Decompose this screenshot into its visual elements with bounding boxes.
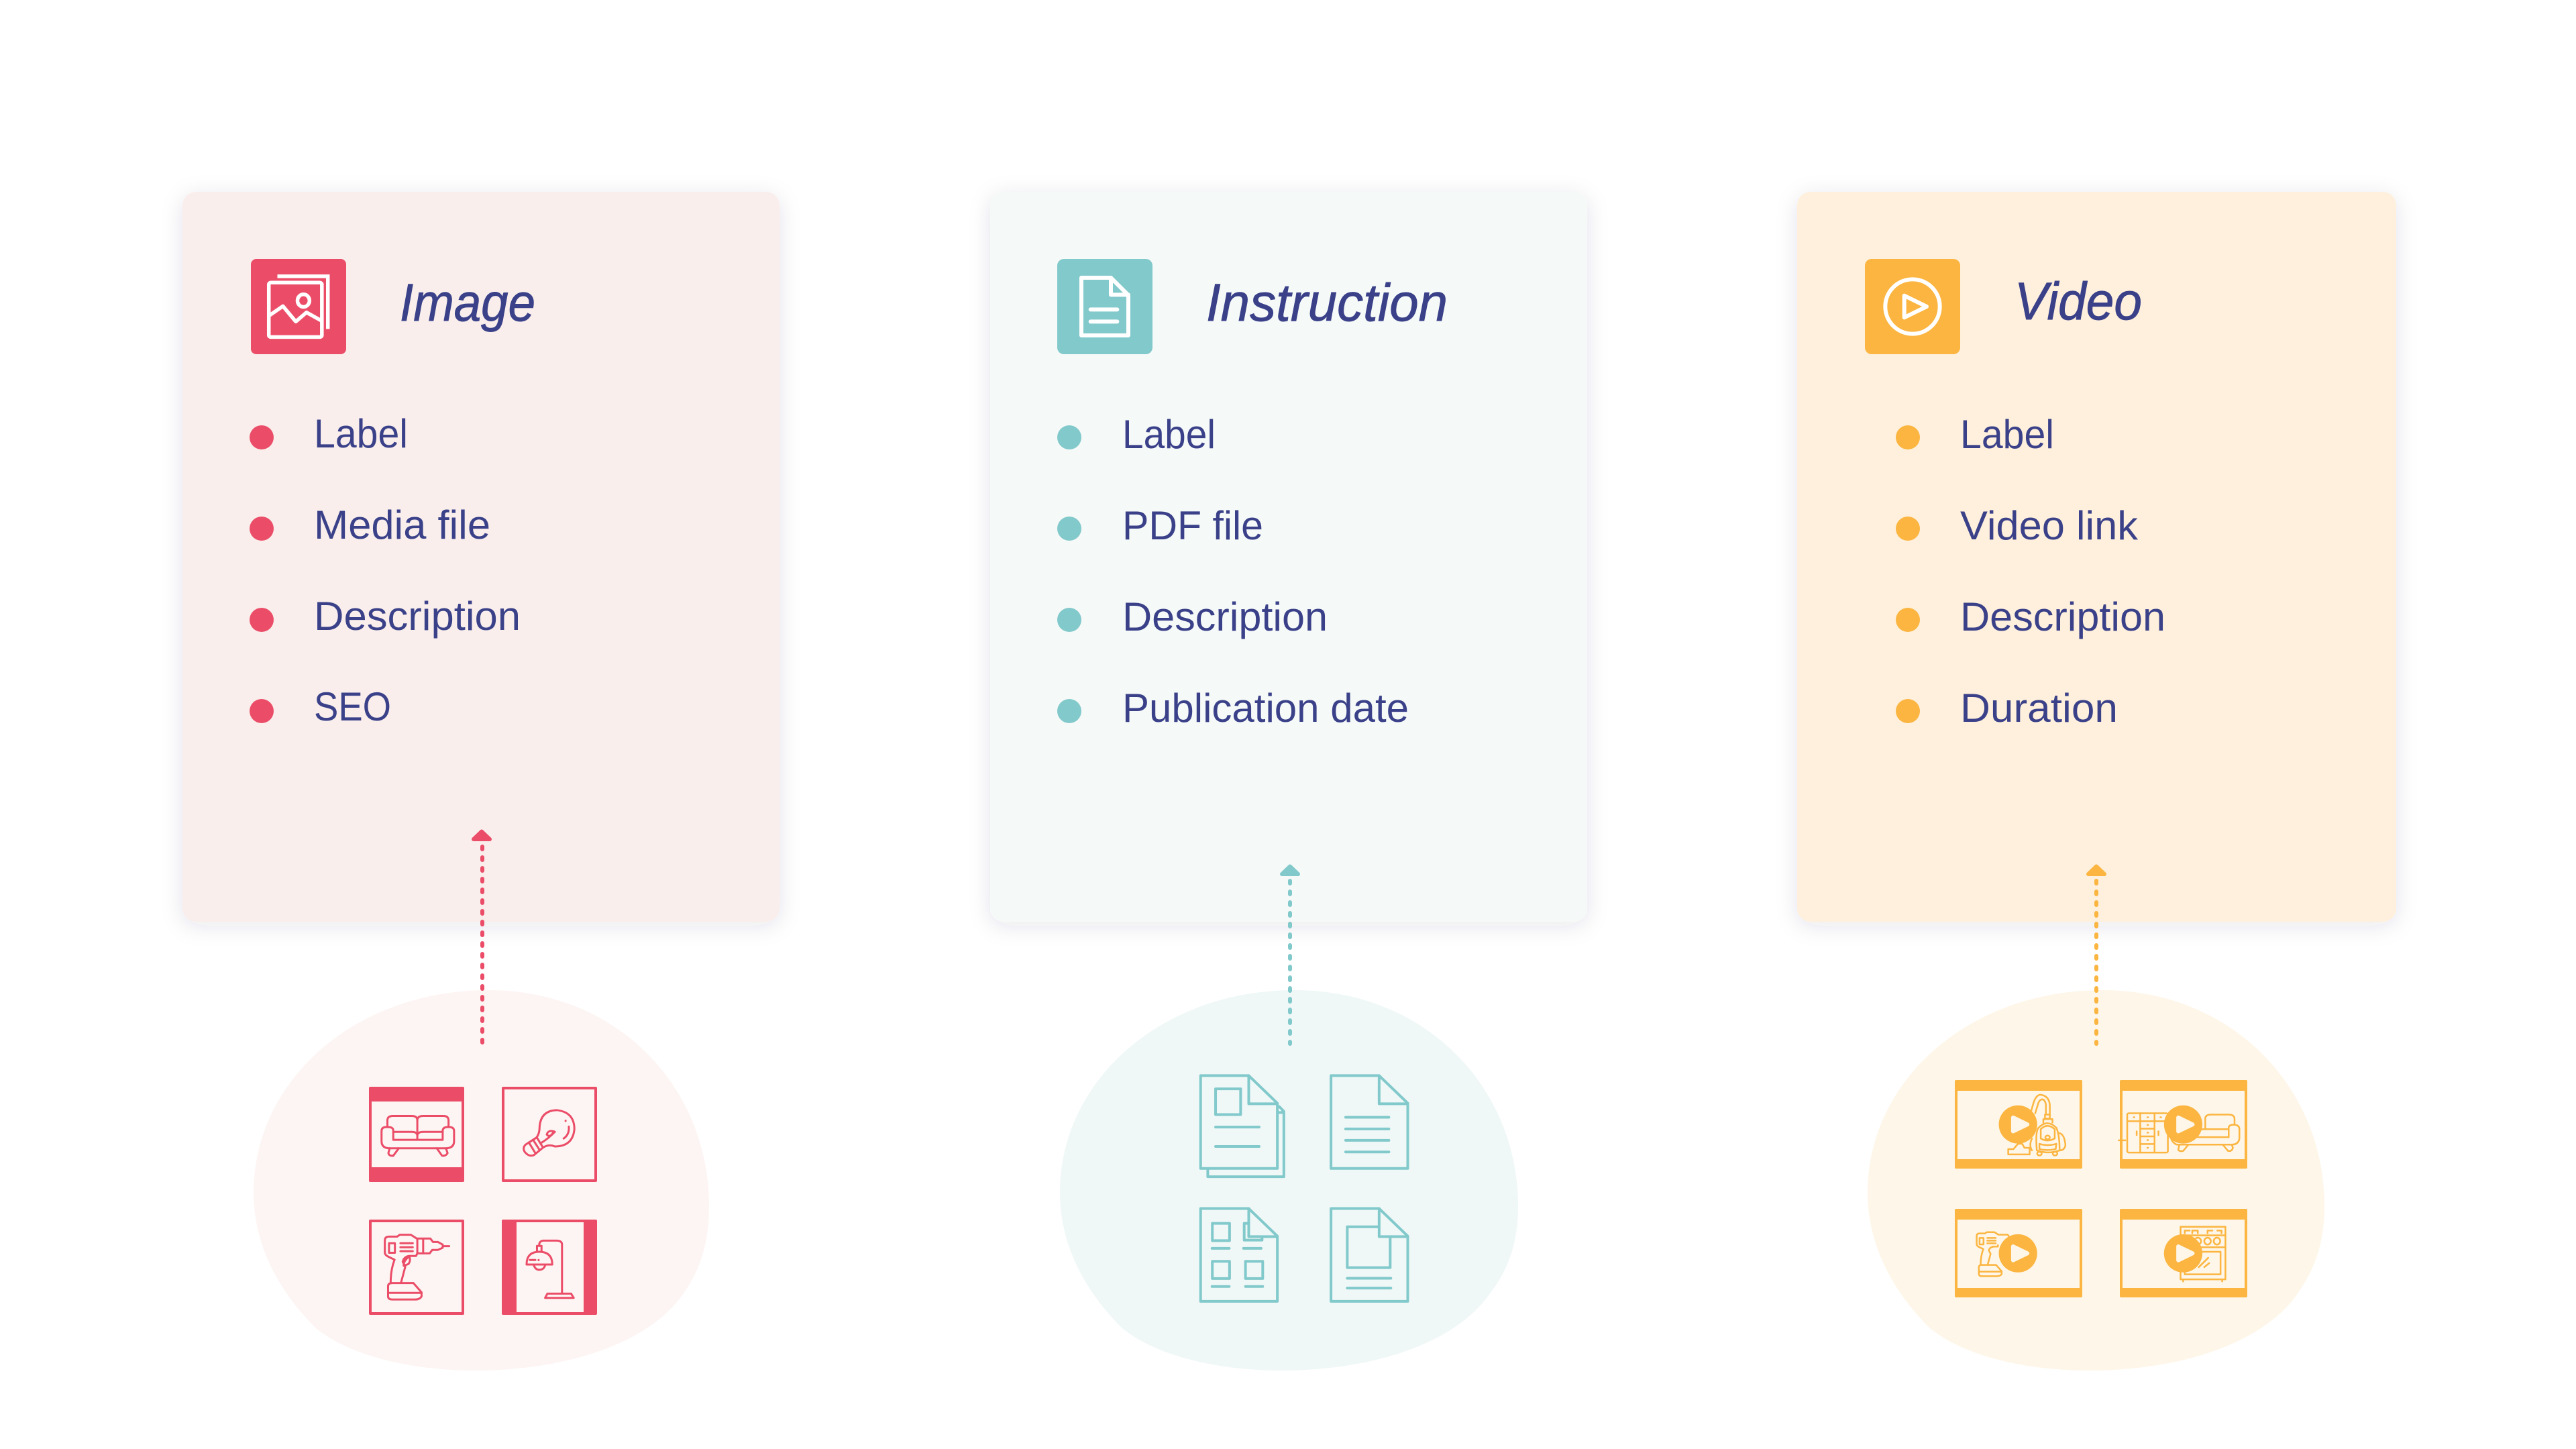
list: instruction fields: Label xyxy=(1122,412,1216,457)
panel: image xyxy=(182,192,780,922)
thumbnail: drill xyxy=(369,1220,464,1315)
list: video fields: Duration xyxy=(1960,686,2118,731)
list: instruction fields: PDF file xyxy=(1122,503,1263,548)
document: stacked pages xyxy=(1201,1075,1284,1177)
list: image fields: Label xyxy=(314,411,408,456)
icon: play xyxy=(1865,259,1960,354)
list: image fields: SEO xyxy=(314,684,391,729)
panel: instruction xyxy=(990,192,1587,922)
thumbnail: floor lamp xyxy=(502,1220,597,1315)
play button xyxy=(1999,1234,2037,1273)
blob: image assets xyxy=(254,990,709,1371)
heading: video: Video xyxy=(2015,271,2142,331)
thumbnail: sofa xyxy=(369,1087,464,1182)
arrow: assets to video xyxy=(2088,867,2104,1044)
list: instruction fields xyxy=(1057,412,1409,731)
thumbnail: light bulb xyxy=(502,1087,597,1182)
video thumbnail: cabinet and sofa xyxy=(2118,1080,2247,1169)
play button xyxy=(2164,1234,2202,1273)
play button xyxy=(2164,1106,2202,1144)
heading: instruction: Instruction xyxy=(1206,272,1448,332)
icon: image xyxy=(251,259,346,354)
video thumbnail: drill xyxy=(1955,1209,2082,1297)
video thumbnail: oven xyxy=(2120,1209,2247,1297)
document: image and text xyxy=(1331,1209,1408,1301)
blob: instruction assets xyxy=(1060,990,1518,1371)
list: video fields: Description xyxy=(1960,594,2165,639)
heading: image: Image xyxy=(400,272,535,332)
blob: video assets xyxy=(1868,990,2324,1371)
list: video fields xyxy=(1896,412,2165,731)
video thumbnail: vacuum cleaner xyxy=(1955,1080,2082,1169)
list: image fields xyxy=(250,411,521,729)
document: text lines xyxy=(1331,1075,1408,1169)
list: image fields: Description xyxy=(314,594,521,639)
arrow: assets to image xyxy=(474,832,490,1043)
play button xyxy=(1999,1106,2037,1144)
list: instruction fields: Description xyxy=(1122,594,1328,639)
list: video fields: Video link xyxy=(1960,503,2139,548)
icon: document xyxy=(1057,259,1152,354)
panel: video xyxy=(1797,192,2396,922)
list: video fields: Label xyxy=(1960,412,2054,457)
document: grid xyxy=(1201,1209,1277,1301)
list: instruction fields: Publication date xyxy=(1122,686,1409,731)
list: image fields: Media file xyxy=(314,502,490,547)
arrow: assets to instruction xyxy=(1282,867,1298,1044)
